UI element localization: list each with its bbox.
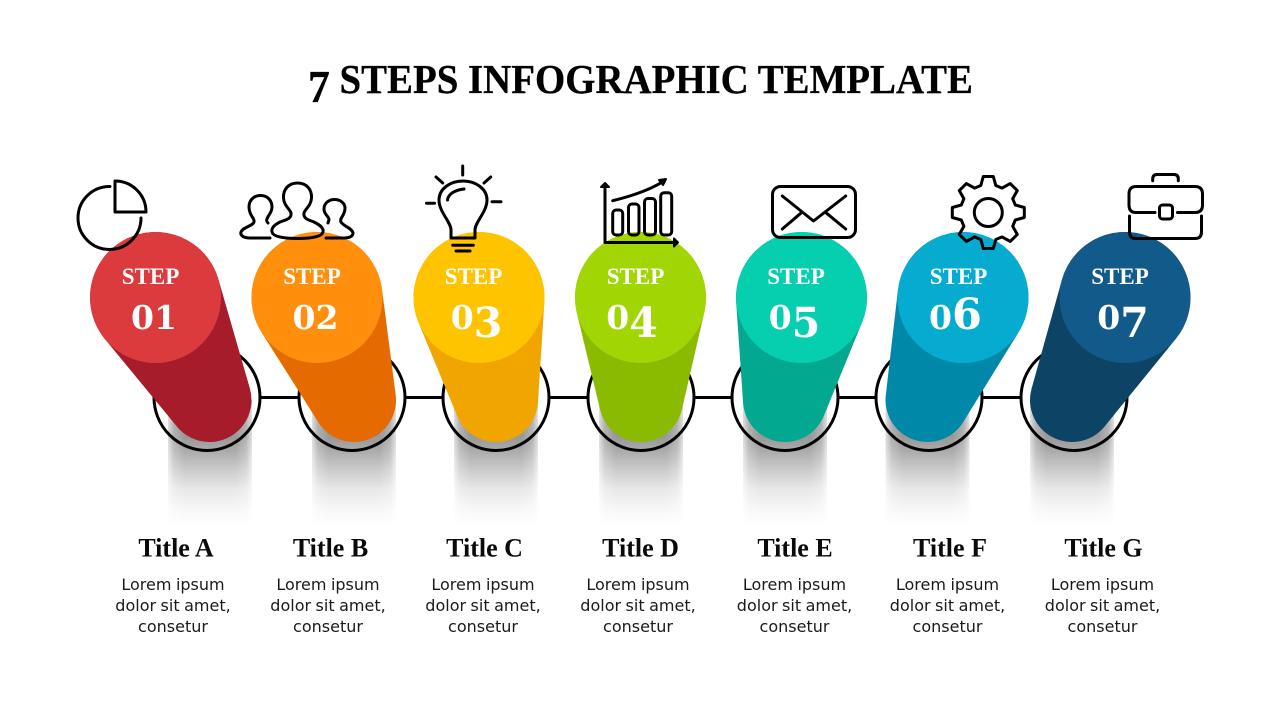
ring 7 [1021, 344, 1127, 450]
icon: bar chart [601, 179, 678, 246]
text A: Lorem ipsum [121, 575, 225, 594]
step label 2: STEP [283, 264, 341, 289]
text B: dolor sit amet, [270, 596, 386, 615]
text D: dolor sit amet, [580, 596, 696, 615]
text F: consetur [913, 617, 983, 636]
shadow 3 [454, 403, 538, 508]
text B: consetur [293, 617, 363, 636]
step 2 [241, 183, 405, 636]
cap 7 [1060, 232, 1190, 363]
cylinder 6 [886, 232, 1028, 442]
ring 1 [154, 344, 260, 450]
number 6: 06 [929, 290, 982, 340]
cap 3 [414, 232, 544, 363]
shadow 7 [1030, 403, 1114, 508]
step 7 [1021, 174, 1202, 636]
cylinder 7 [1030, 232, 1191, 442]
text C: Lorem ipsum [431, 575, 535, 594]
cylinder 4 [575, 232, 706, 442]
text C: consetur [448, 617, 518, 636]
cylinder 1 [90, 232, 252, 442]
shadow 2 [312, 402, 396, 508]
ring 4 [588, 344, 694, 450]
text F: Lorem ipsum [896, 575, 999, 594]
number 3: 3 [474, 299, 502, 347]
icon: envelope [772, 186, 856, 238]
step label 4: STEP [607, 264, 664, 289]
step 4 [575, 179, 706, 636]
cylinder 5 [736, 232, 867, 442]
title: 7 [308, 61, 330, 112]
ring 2 [299, 344, 405, 450]
title C: Title C [446, 534, 523, 562]
title F: Title F [913, 534, 987, 562]
number 5: 5 [792, 299, 820, 347]
cap 5 [736, 232, 867, 363]
shadow 6 [886, 402, 970, 508]
text D: Lorem ipsum [586, 575, 690, 594]
step label 6: STEP [930, 264, 987, 289]
title B: Title B [293, 534, 368, 562]
number 4: 4 [629, 299, 658, 347]
shadow 1 [168, 400, 252, 508]
step label 7: STEP [1091, 264, 1149, 289]
ring 5 [732, 344, 838, 450]
step label 5: STEP [767, 264, 825, 289]
cylinder 2 [252, 232, 396, 442]
cap 6 [898, 232, 1028, 363]
shadow 4 [599, 406, 683, 508]
text F: dolor sit amet, [890, 596, 1005, 615]
text G: Lorem ipsum [1051, 575, 1154, 594]
text G: consetur [1068, 617, 1138, 636]
title D: Title D [602, 534, 679, 562]
step label 3: STEP [445, 264, 502, 289]
title E: Title E [757, 534, 833, 562]
step 3 [414, 166, 549, 636]
title A: Title A [138, 534, 214, 562]
shadow 5 [743, 403, 827, 508]
text A: consetur [138, 617, 208, 636]
icon: pie chart [78, 181, 146, 249]
step 5 [732, 186, 867, 636]
ring 3 [443, 344, 549, 450]
step 1 [78, 181, 260, 636]
cap 1 [90, 232, 221, 363]
number 5: 0 [769, 298, 792, 337]
number 1: 01 [131, 298, 177, 337]
text B: Lorem ipsum [276, 575, 380, 594]
text E: dolor sit amet, [737, 596, 852, 615]
cap 2 [252, 232, 382, 363]
cylinder 3 [414, 232, 545, 442]
text D: consetur [603, 617, 673, 636]
title: STEPS INFOGRAPHIC TEMPLATE [330, 56, 973, 102]
cap 4 [575, 232, 706, 363]
step 6 [876, 176, 1028, 636]
icon: briefcase [1129, 174, 1202, 238]
text E: consetur [760, 617, 830, 636]
number 2: 02 [293, 298, 338, 337]
step label 1: STEP [122, 264, 179, 289]
text A: dolor sit amet, [115, 596, 231, 615]
connector line [260, 396, 1021, 399]
icon: gear [952, 176, 1024, 248]
icon: people [241, 183, 353, 238]
ring 6 [876, 344, 982, 450]
number 7: 0 [1097, 298, 1120, 337]
text G: dolor sit amet, [1045, 596, 1160, 615]
title G: Title G [1064, 534, 1143, 562]
number 7: 7 [1120, 299, 1149, 347]
number 4: 0 [606, 298, 629, 337]
icon: light bulb [426, 166, 501, 251]
text C: dolor sit amet, [425, 596, 541, 615]
number 3: 0 [451, 298, 474, 337]
text E: Lorem ipsum [743, 575, 846, 594]
